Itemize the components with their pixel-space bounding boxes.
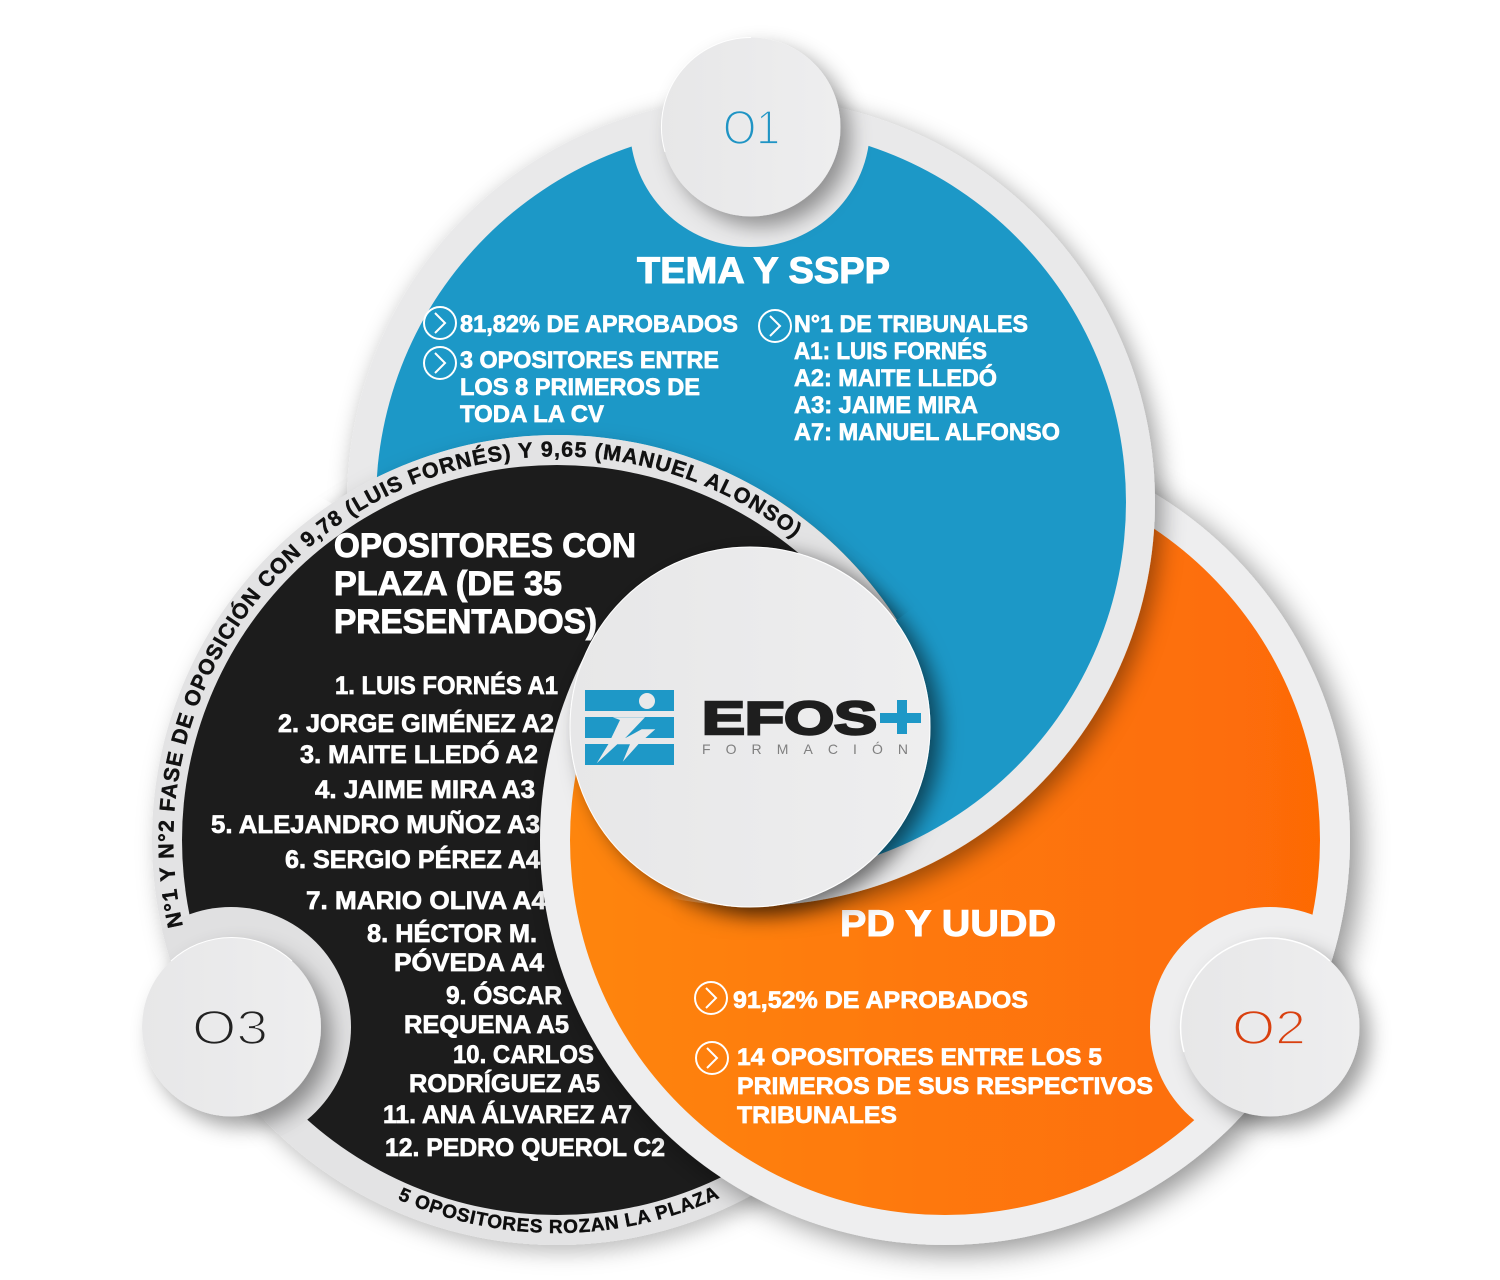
orange bullet two [737,1044,1153,1129]
orange circle ring [540,435,1350,1245]
ranked list of successful candidates: 1. LUIS FORNÉS A1 [335,671,558,700]
number badge 03 [142,937,321,1116]
blue bullet: tribunals [794,311,1060,446]
black panel heading [334,527,636,641]
disc [570,547,930,907]
number badge 03: O3 [192,1002,268,1055]
blue heading: TEMA Y SSPP [637,250,890,291]
icon: chevron circle [759,310,791,342]
ranked list of successful candidates: 9. ÓSCAR [446,980,562,1010]
icon: chevron circle [696,1042,728,1074]
ranked list of successful candidates [211,671,665,1162]
notch for number 01 [632,138,868,247]
number badge 01 [661,37,840,216]
blue bullet: top candidates [460,350,718,422]
number badge 02 [1180,938,1360,1116]
blue bullet: tribunals: A7: MANUEL ALFONSO [794,419,1060,446]
orange bullet one: 91,52% DE APROBADOS [733,987,1028,1014]
ranked list of successful candidates: 2. JORGE GIMÉNEZ A2 [278,709,554,738]
panel: orange circle PD Y UUDD [540,435,1390,1245]
blue bullet: approved: 81,82% DE APROBADOS [460,311,738,338]
logo plus sign [880,700,921,734]
ranked list of successful candidates: 3. MAITE LLEDÓ A2 [300,739,538,769]
ranked list of successful candidates: PÓVEDA A4 [394,947,544,977]
black panel heading: PRESENTADOS) [334,603,597,641]
panel: black circle base [146,493,770,1264]
black circle upper overlap [331,434,903,620]
blue bullet: tribunals: A1: LUIS FORNÉS [794,337,987,365]
curved ring text: top: N°1 Y N°2 FASE DE OPOSICIÓN CON 9,78 (LUIS FORNÉS) Y 9,65 (MANUEL ALONSO) [158,441,801,928]
blue bullet: top candidates: 3 OPOSITORES ENTRE [460,347,719,374]
number badge 01: O1 [723,102,780,155]
ranked list of successful candidates: 8. HÉCTOR M. [367,919,537,948]
orange heading: PD Y UUDD [840,903,1056,944]
blue bullet: tribunals: N°1 DE TRIBUNALES [794,311,1028,338]
ranked list of successful candidates: REQUENA A5 [404,1011,569,1039]
ranked list of successful candidates: 12. PEDRO QUEROL C2 [385,1134,665,1162]
ranked list of successful candidates: 5. ALEJANDRO MUÑOZ A3 [211,809,540,839]
orange bullet two: PRIMEROS DE SUS RESPECTIVOS [737,1073,1153,1100]
ranked list of successful candidates: 7. MARIO OLIVA A4 [306,887,546,915]
logo icon: runner [585,690,674,765]
logo wordmark: EFOS [702,692,877,744]
ranked list of successful candidates: 11. ANA ÁLVAREZ A7 [383,1100,632,1129]
blue bullet: tribunals: A3: JAIME MIRA [794,392,978,419]
blue bullet: tribunals: A2: MAITE LLEDÓ [794,364,997,392]
ranked list of successful candidates: RODRÍGUEZ A5 [409,1069,600,1098]
ranked list of successful candidates: 4. JAIME MIRA A3 [315,776,535,804]
panel: blue circle TEMA Y SSPP [347,7,1155,906]
curved ring text: bottom: 5 OPOSITORES ROZAN LA PLAZA [398,1187,720,1234]
blue bullet: top candidates: TODA LA CV [460,401,604,428]
black panel heading: PLAZA (DE 35 [334,565,562,603]
orange bullet two: TRIBUNALES [737,1102,897,1129]
blue circle fill [376,127,1126,877]
notch for number 02 [1150,907,1340,1136]
icon: chevron circle [695,982,727,1014]
number badge 02: O2 [1232,1002,1306,1055]
black circle fill [182,465,932,1215]
blue bullet: top candidates: LOS 8 PRIMEROS DE [460,374,700,401]
blue circle ring [347,98,1155,906]
icon: chevron circle [424,307,456,339]
icon: chevron circle [424,347,456,379]
ranked list of successful candidates: 6. SERGIO PÉREZ A4 [285,845,540,874]
orange bullet two: 14 OPOSITORES ENTRE LOS 5 [737,1044,1102,1071]
centre logo disc [570,547,930,907]
notch for number 03 [190,907,351,1120]
black panel heading: OPOSITORES CON [334,527,636,565]
ranked list of successful candidates: 10. CARLOS [453,1041,594,1069]
black circle ring [152,435,962,1245]
orange circle fill [570,465,1320,1215]
logo subtitle: FORMACIÓN [702,741,908,757]
